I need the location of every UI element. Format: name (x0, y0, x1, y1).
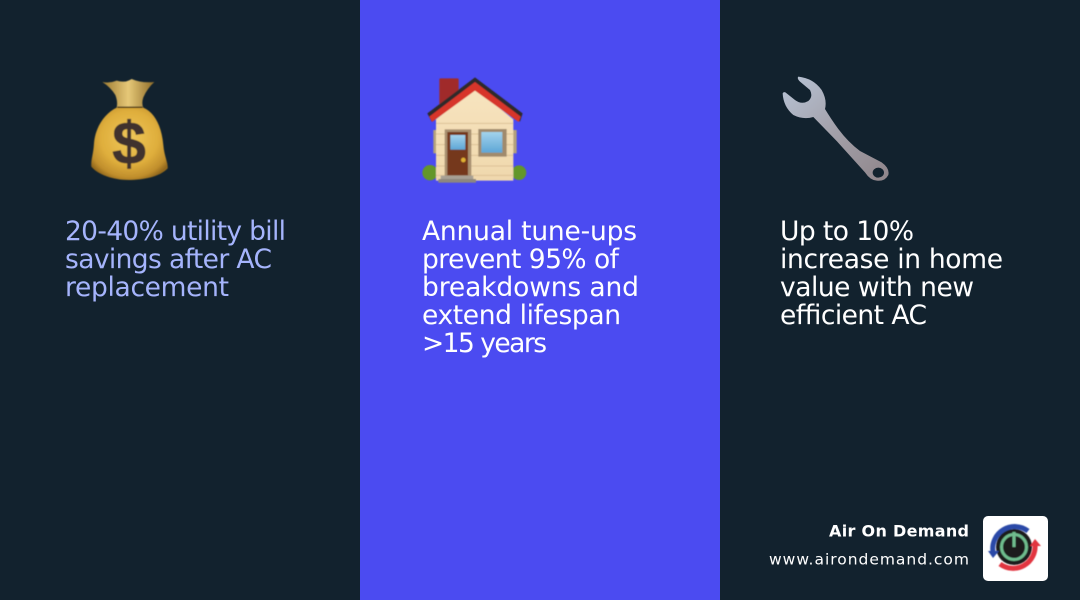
icon: house (422, 77, 526, 183)
icon: money bag: $ (112, 109, 146, 177)
text: tune-ups: >15 years (422, 328, 547, 359)
text: tune-ups: Annual tune-ups (422, 216, 637, 247)
panel: utility savings (0, 0, 360, 600)
logo (983, 516, 1048, 581)
text: tune-ups: extend lifespan (422, 300, 621, 331)
panel: tune-ups (360, 0, 720, 600)
icon: money bag (91, 79, 168, 180)
icon: wrench (783, 77, 889, 181)
website url: www.airondemand.com (769, 550, 969, 568)
text: utility savings: savings after AC (65, 244, 272, 275)
text: home value: Up to 10% (780, 216, 914, 247)
text: utility savings: 20-40% utility bill (65, 216, 286, 247)
brand name: Air On Demand (829, 522, 969, 540)
text: utility savings: replacement (65, 272, 229, 303)
text: home value: efficient AC (780, 300, 927, 331)
text: tune-ups: breakdowns and (422, 272, 639, 303)
text: home value: value with new (780, 272, 974, 303)
panel: home value (720, 0, 1080, 600)
text: home value: increase in home (780, 244, 1003, 275)
text: tune-ups: prevent 95% of (422, 244, 620, 275)
